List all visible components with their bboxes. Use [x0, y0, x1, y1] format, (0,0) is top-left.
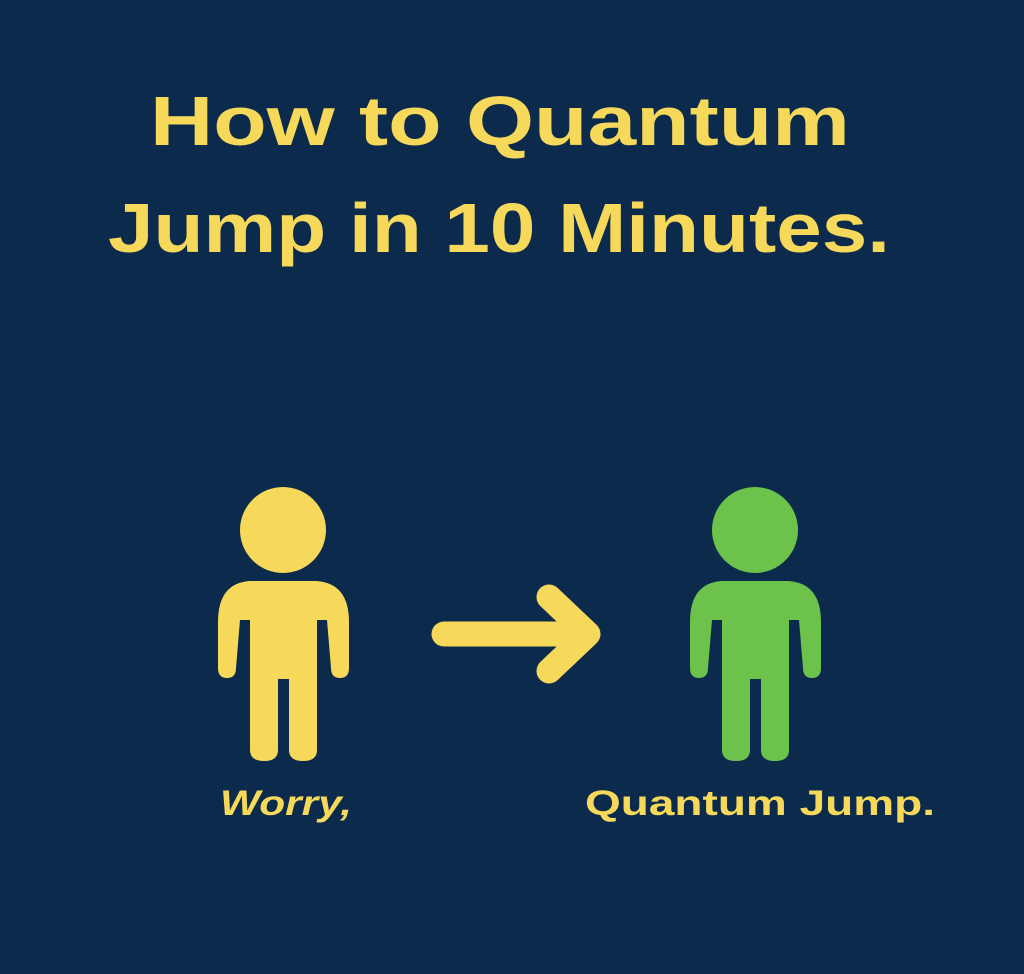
title: How to Quantum	[150, 82, 850, 160]
title	[108, 82, 890, 267]
title: Jump in 10 Minutes.	[108, 189, 890, 267]
icon: green person (quantum jump)	[690, 487, 821, 761]
label: quantum jump: Quantum Jump.	[585, 784, 935, 823]
icon: yellow person (worry)	[218, 487, 349, 761]
arrow	[444, 597, 588, 671]
label: worry: Worry,	[220, 784, 352, 823]
